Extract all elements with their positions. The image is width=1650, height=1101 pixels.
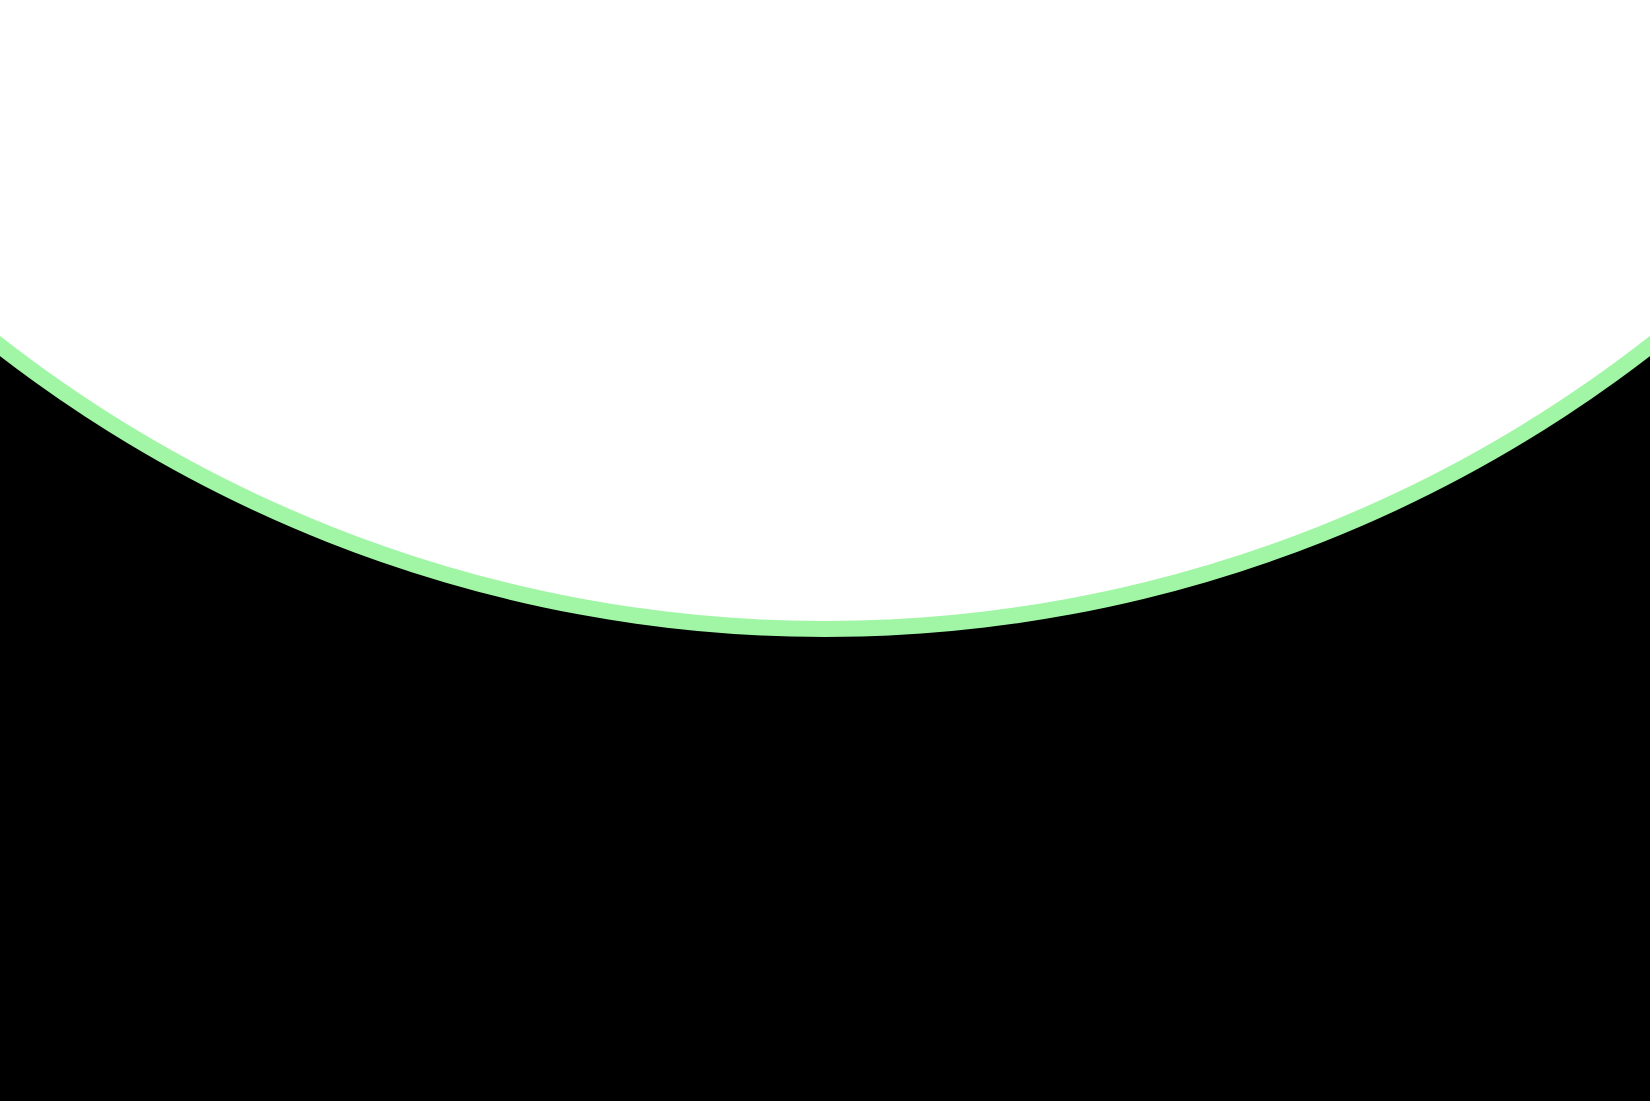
- white dome with green rim arc: [0, 0, 1650, 629]
